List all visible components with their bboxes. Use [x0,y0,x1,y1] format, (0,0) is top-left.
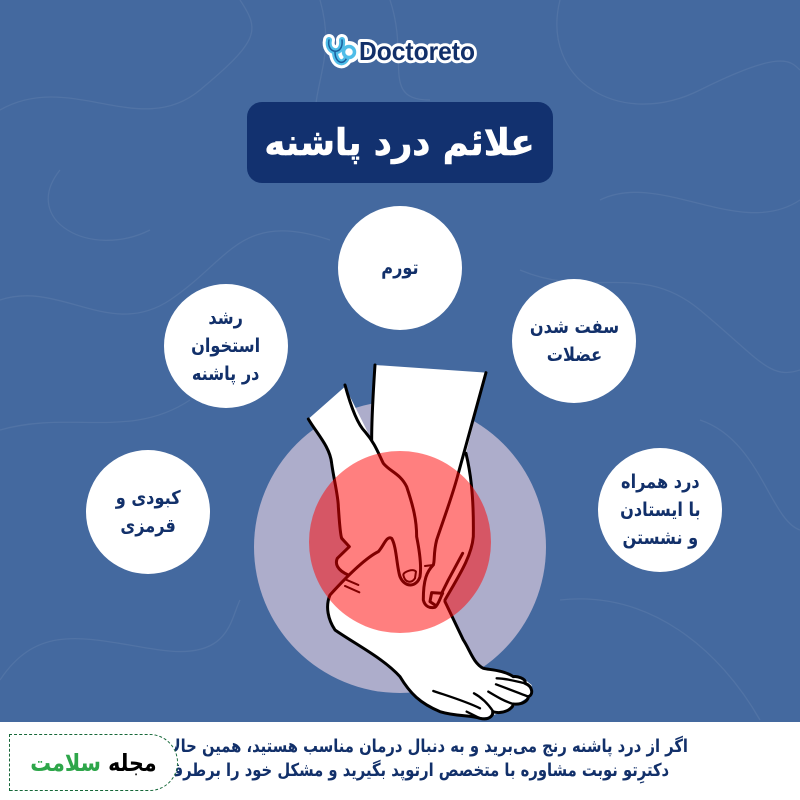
symptom bubble: pain standing and sitting [598,448,722,572]
title [247,102,553,183]
symptom bubble: pain standing and sitting: درد همراه [621,471,699,493]
symptom bubble: pain standing and sitting: و نشستن [622,527,698,549]
symptom bubble: swelling: تورم [381,257,419,279]
magazine tag: مجله سلامت [30,748,157,776]
symptom bubble: bruising and redness [86,450,210,574]
symptom bubble: muscle stiffness: سفت شدن [529,316,619,338]
symptom bubble: heel bone growth: رشد [209,307,243,329]
symptom bubble: heel bone growth [164,284,288,408]
footer call to action text: اگر از درد پاشنه رنج می‌برید و به دنبال درمان مناسب هستید، همین حالا [175,736,688,757]
symptom bubble: bruising and redness: کبودی و [116,487,180,509]
symptom bubble: swelling [338,206,462,330]
icon: stethoscope [329,40,357,62]
red pain circle [309,451,491,633]
magazine tag [9,734,178,791]
title: علائم درد پاشنه [265,121,535,164]
outer halo circle [254,401,546,693]
footer call to action text [175,736,688,784]
foot and hand [308,365,532,719]
symptom bubble: muscle stiffness: عضلات [546,344,602,366]
symptom bubble: muscle stiffness [512,279,636,403]
symptom bubble: heel bone growth: استخوان [191,335,261,357]
symptom bubble: pain standing and sitting: با ایستادن [620,499,700,521]
logo: Doctoreto [322,34,477,68]
logo wordmark: Doctoreto [359,36,475,66]
symptom bubble: bruising and redness: قرمزی [120,515,176,537]
footer panel [0,722,800,800]
symptom bubble: heel bone growth: در پاشنه [192,363,260,385]
